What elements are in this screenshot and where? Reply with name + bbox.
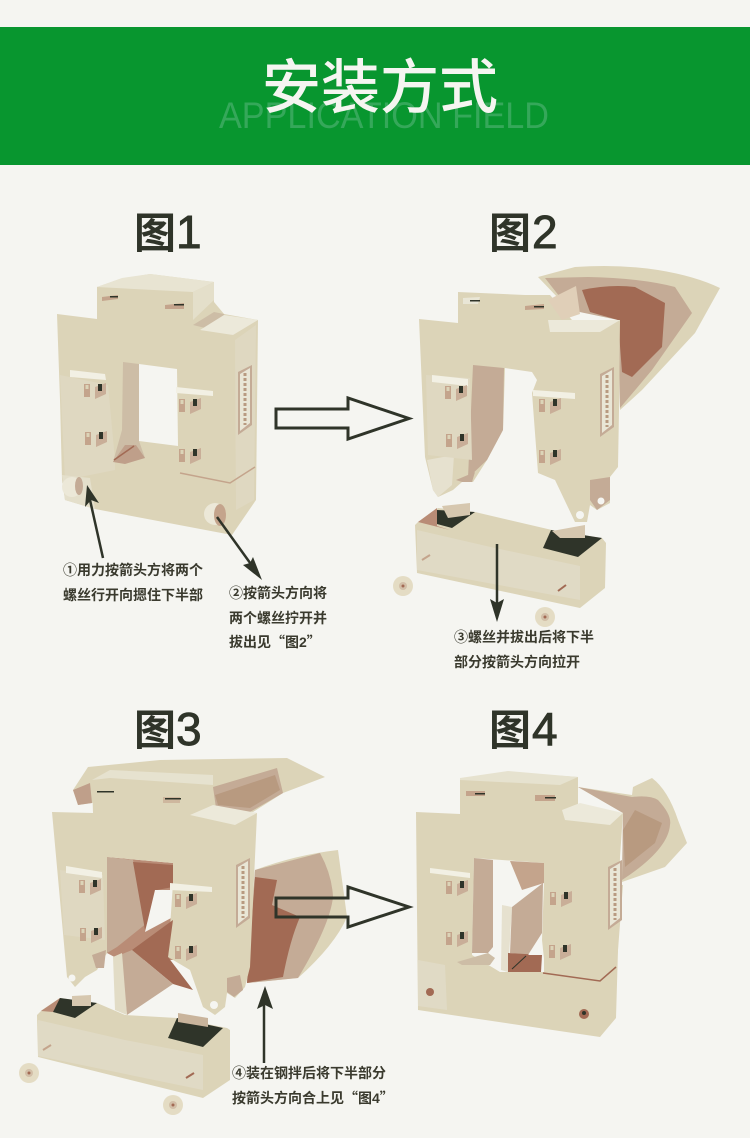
caption: step 4 [232,1065,394,1108]
screws [426,988,589,1019]
copper bar [113,920,193,1015]
slots on top tab [102,295,184,309]
caption: step 2: ②按箭头方向将 [229,585,327,601]
slots [97,791,181,803]
upper body with legs [419,292,620,522]
cable bundle [538,266,720,410]
caption: step 3 [454,629,594,670]
caption: step 4: ④装在钢拌后将下半部分 [232,1065,386,1081]
inner wall shadow [113,362,145,462]
caption: step 4: 按箭头方向合上见“图4” [232,1088,394,1108]
caption: step 2: 两个螺丝拧开并 [229,610,327,626]
joint line [543,967,616,981]
rating label [238,365,252,435]
upper body with legs [52,775,257,1015]
caption: step 2 [229,585,327,652]
right cable [247,850,347,983]
rating label [236,858,250,928]
sockets [66,866,212,961]
caption: step 1: 螺丝行开向摁住下半部 [63,587,203,603]
top cable [73,758,325,812]
rating label [608,860,622,930]
device: figure 1 assembled transformer [57,274,258,535]
lower half block [415,503,606,608]
window interior [457,858,544,972]
arrow: step 1 pointer [85,485,103,558]
header banner [0,27,750,165]
slots [466,791,556,801]
subtitle: APPLICATION FIELD: APPLICATION FIELD [219,95,549,136]
arrow: step 3 pointer [490,544,504,622]
heading: figure 3: 3 [176,703,202,755]
heading: figure 2: 2 [532,206,558,258]
heading: figure 4: 4 [532,703,558,755]
caption: step 1: ①用力按箭头方将两个 [63,562,203,578]
joint line [180,467,255,483]
block arrow: figure 3 to figure 4 [276,887,409,927]
device: figure 2 opened transformer with cable [393,266,720,627]
screws [62,477,226,526]
heading: figure 4: 图 [489,707,531,754]
block arrow: figure 1 to figure 2 [276,398,409,439]
device: figure 4 closed transformer around conductor [416,771,687,1037]
caption: step 3: 部分按箭头方向拉开 [454,654,580,670]
window opening [139,364,178,446]
heading: figure 1: 图 [134,210,176,257]
cable behind [578,778,687,882]
device: figure 3 fitting onto conductor [19,758,347,1115]
rating label [600,367,614,437]
arrow: step 4 pointer [257,986,273,1063]
loose nuts [19,1063,183,1115]
sockets [70,370,213,464]
arrow: step 2 pointer [217,517,262,580]
loose nuts [393,576,555,627]
heading: figure 3: 图 [134,707,176,754]
caption: step 1 [63,562,203,603]
heading: figure 2: 图 [489,210,531,257]
body [416,772,623,1037]
title: 安装方式 [262,55,498,121]
lower half block [37,995,230,1098]
heading: figure 1: 1 [176,206,202,258]
slots [463,297,544,310]
caption: step 3: ③螺丝并拔出后将下半 [454,629,594,645]
caption: step 2: 拔出见“图2” [229,632,321,652]
sockets [432,375,575,465]
opening interior [107,857,173,960]
sockets [430,868,572,960]
right pillar [542,882,623,980]
